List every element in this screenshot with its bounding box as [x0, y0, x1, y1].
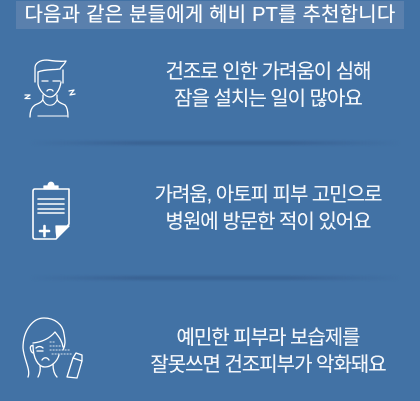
text block: atopic skin concerns: 가려움, 아토피 피부 고민으로 — [154, 184, 382, 206]
text block: sensitive skin moisturizer — [150, 327, 386, 376]
text block: atopic skin concerns — [154, 184, 382, 232]
icon: medical clipboard — [33, 182, 69, 239]
text block: dry skin itching: 잠을 설치는 일이 많아요 — [174, 88, 362, 110]
text block: dry skin itching: 건조로 인한 가려움이 심해 — [165, 61, 371, 83]
text block: atopic skin concerns: 병원에 방문한 적이 있어요 — [165, 210, 371, 232]
text block: sensitive skin moisturizer: 잘못쓰면 건조피부가 악화돼요 — [150, 354, 386, 376]
text block: dry skin itching — [165, 61, 371, 110]
text block: sensitive skin moisturizer: 예민한 피부라 보습제를 — [176, 327, 360, 349]
icon: woman with spray — [23, 318, 82, 378]
heading banner: 다음과 같은 분들에게 헤비 PT를 추천합니다 — [25, 4, 395, 26]
icon: sleeping man — [25, 60, 75, 117]
